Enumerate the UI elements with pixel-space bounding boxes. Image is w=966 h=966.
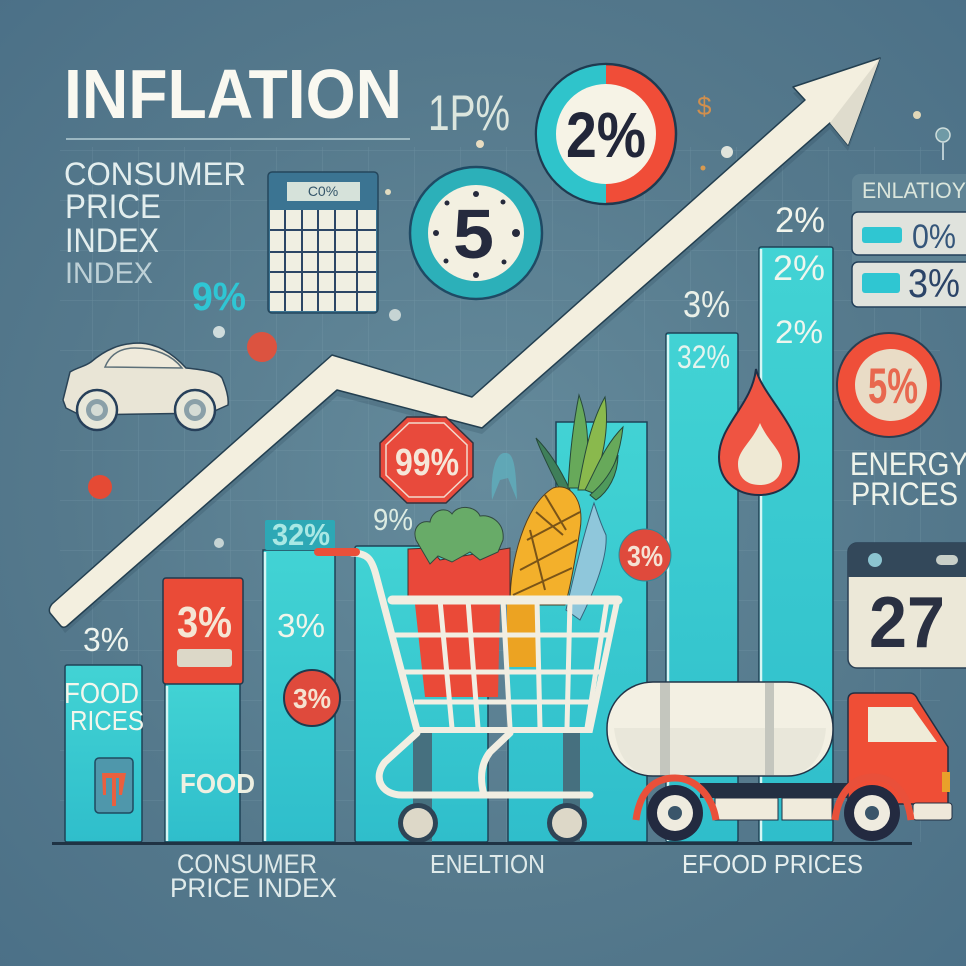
bar labels: 32% — [677, 339, 730, 375]
icon: calendar — [848, 543, 966, 668]
bar 3 header — [265, 520, 335, 550]
bar labels: 32% — [272, 517, 330, 552]
panel: inflation legend: 0% — [912, 218, 956, 256]
percent label: 1P%: 1P% — [428, 85, 510, 141]
tank — [607, 682, 833, 776]
axis label: consumer price index: PRICE INDEX — [170, 873, 337, 903]
icon: red circle 3% beside cart: 3% — [627, 541, 663, 573]
axis label: efood prices: EFOOD PRICES — [682, 849, 863, 879]
wheels — [647, 785, 703, 841]
red box — [408, 548, 510, 604]
handle and frame — [352, 553, 417, 730]
panel: inflation legend: 3% — [908, 262, 960, 306]
dollar mark and pin — [697, 91, 950, 160]
bar 2 — [165, 680, 240, 842]
bar labels: 3% — [683, 284, 730, 325]
bar labels: FOOD — [180, 768, 255, 799]
text block: consumer price index: INDEX — [65, 222, 159, 260]
bar 4 — [355, 546, 488, 842]
text block: consumer price index: PRICE — [65, 188, 161, 226]
icon: tanker truck — [607, 682, 952, 841]
panel: inflation legend: ENLATIOY — [862, 178, 966, 203]
pineapple — [510, 487, 581, 605]
bar labels: 3% — [277, 607, 325, 644]
red tag 3% — [163, 578, 243, 684]
growth arrow — [49, 58, 880, 633]
icon: car — [63, 343, 228, 430]
icon: octagon stop sign 99%: 99% — [395, 442, 459, 484]
icon: octagon stop sign 99% — [380, 417, 473, 503]
bar 3 — [263, 550, 335, 842]
bar labels: FOOD — [64, 678, 139, 710]
bar labels: 3% — [83, 621, 129, 658]
axis label: eneltion: ENELTION — [430, 849, 545, 879]
icon: red circle 3%: 3% — [293, 683, 331, 714]
bar 6 — [666, 333, 738, 842]
title: INFLATION — [64, 55, 402, 133]
panel: inflation legend — [852, 174, 966, 308]
bar labels: 2% — [775, 201, 825, 240]
cab — [848, 693, 948, 804]
basket — [392, 596, 618, 604]
axis label: consumer price index: CONSUMER — [177, 849, 317, 879]
bar 7 — [759, 247, 833, 842]
icon: calculator — [268, 172, 378, 313]
icon: 2% gauge: 2% — [566, 99, 646, 171]
decorative dots — [88, 111, 921, 548]
dollar mark and pin: $ — [697, 91, 712, 121]
icon: 2% gauge — [536, 64, 676, 204]
text: energy prices — [850, 446, 966, 512]
blue wrap — [566, 503, 606, 620]
bar highlights and gaps — [167, 249, 761, 842]
baseline axis — [52, 842, 912, 845]
bar labels: RICES — [70, 705, 144, 736]
icon: shopping cart with groceries — [318, 395, 623, 843]
chassis — [700, 783, 850, 798]
icon: dial 5 — [410, 167, 542, 299]
text block: consumer price index — [64, 156, 246, 290]
ghost icon behind groceries — [492, 453, 517, 500]
icon: 5% red badge — [837, 333, 941, 437]
greens — [415, 507, 503, 564]
icon: red circle 3% — [284, 670, 340, 726]
icon: small fuel box on bar 1 — [95, 758, 133, 813]
icon: dial 5: 5 — [453, 195, 494, 273]
axis label: consumer price index — [170, 849, 337, 903]
bar labels: 9% — [373, 502, 413, 537]
red tag 3%: 3% — [177, 598, 232, 647]
fenders — [636, 778, 716, 820]
icon: fuel drop — [719, 369, 799, 495]
text block: consumer price index: INDEX — [65, 257, 153, 290]
bar 5 — [508, 422, 647, 842]
icon: red circle 3% beside cart — [619, 529, 671, 581]
bars chart — [65, 247, 833, 842]
bar labels — [64, 201, 825, 799]
bar labels: 2% — [773, 249, 825, 288]
wheels — [398, 803, 438, 843]
icon: calculator: C0% — [308, 183, 338, 199]
text block: consumer price index: CONSUMER — [64, 156, 246, 192]
percent label: 9%: 9% — [192, 275, 246, 319]
bar 1 — [65, 665, 142, 842]
icon: 5% red badge: 5% — [868, 358, 918, 414]
icon: calendar: 27 — [869, 583, 945, 663]
leaves — [536, 395, 623, 500]
bar labels: 2% — [775, 314, 823, 350]
